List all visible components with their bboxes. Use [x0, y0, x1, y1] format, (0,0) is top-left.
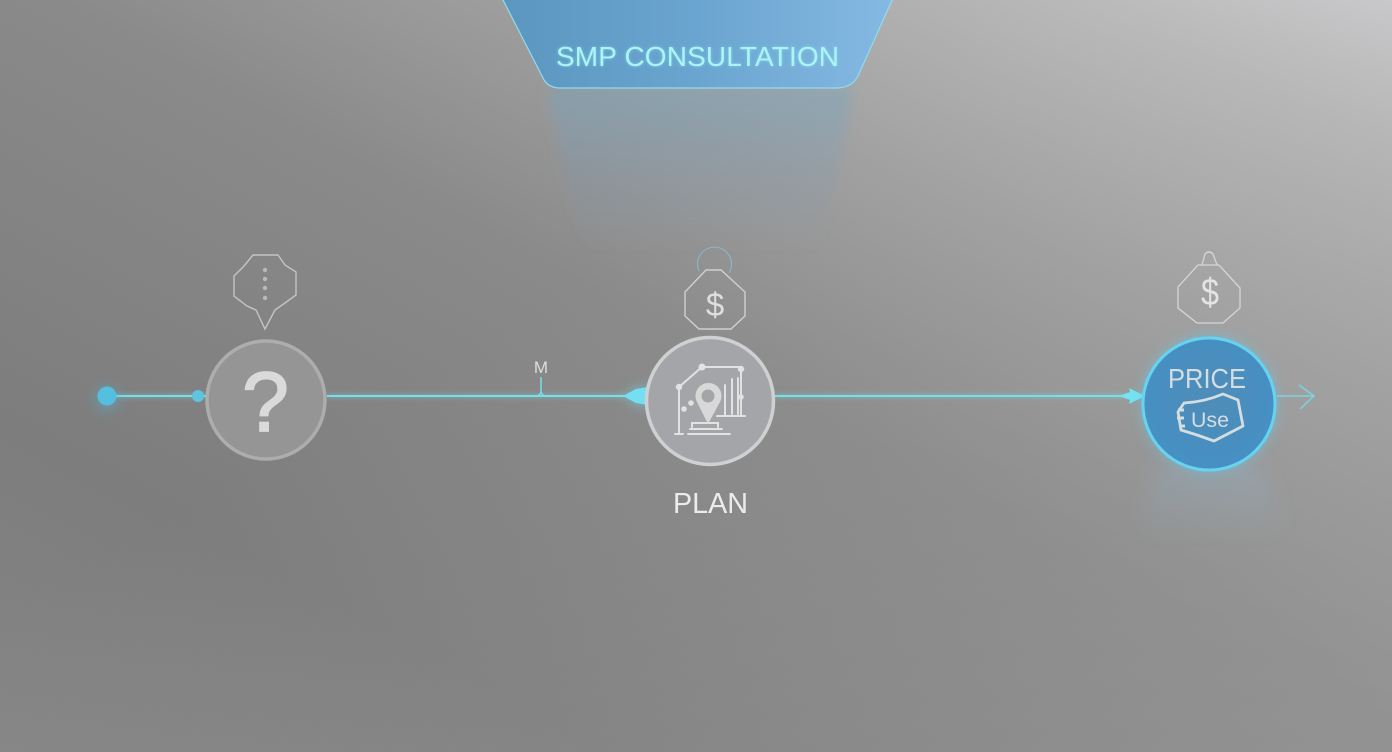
step 3: price circle: [1141, 336, 1277, 472]
arrowhead into price: [1119, 388, 1145, 404]
icon: dollar tag above price: $: [1201, 272, 1219, 314]
step 2: plan circle: [646, 338, 774, 464]
price label: PRICE: [1168, 363, 1246, 394]
icon: price tag: Use: [1191, 409, 1229, 432]
small connector dot: [192, 390, 204, 402]
timeline connector: [107, 394, 1142, 398]
icon: dollar tag above plan: $: [706, 286, 724, 323]
banner: SMP Consultation: [502, 0, 893, 88]
glow below price: [1135, 465, 1285, 535]
light beam below banner: [548, 88, 853, 250]
icon: dollar tag above price: [1178, 252, 1240, 323]
question mark: ?: [242, 355, 289, 449]
plan label: PLAN: [673, 488, 748, 520]
exit arrow: [1277, 385, 1314, 409]
icon: map pin and buildings: [675, 364, 745, 434]
step 1: question circle: [207, 341, 325, 459]
arrowhead into plan: [623, 385, 648, 408]
icon: speech bubble with dots: [234, 255, 296, 329]
milestone marker M: [534, 358, 548, 396]
banner title glow: SMP CONSULTATION: [556, 41, 839, 72]
milestone marker M: M: [534, 358, 548, 377]
banner title: SMP CONSULTATION: [556, 41, 839, 72]
start node: [95, 386, 119, 411]
icon: dollar tag above plan: [685, 247, 745, 329]
map pin: [696, 383, 721, 424]
